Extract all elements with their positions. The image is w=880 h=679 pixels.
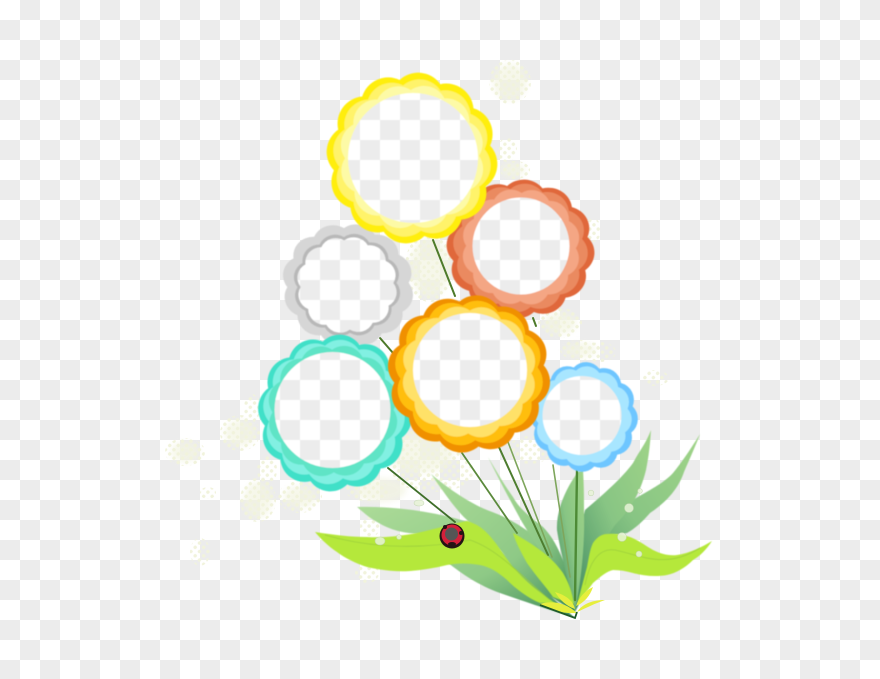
leaf: far right pointed leaf	[575, 434, 700, 612]
flower: orange	[442, 174, 599, 324]
halftone splashes behind bouquet	[165, 60, 669, 583]
leaf: long left back leaf	[357, 507, 575, 618]
leaf: narrow back leaf	[488, 457, 575, 605]
dark base stroke	[540, 605, 577, 618]
flower: teal	[251, 328, 419, 498]
back green leaves	[357, 430, 700, 618]
leaf: bright right leaf	[577, 534, 712, 604]
ladybird	[440, 524, 464, 548]
flower: yellow	[318, 64, 506, 252]
flower: blue	[527, 359, 641, 475]
water drops	[375, 489, 642, 557]
flower: amber	[377, 284, 561, 464]
leaf veins	[325, 535, 700, 600]
leaf: big middle back leaf	[431, 474, 575, 612]
leaf: bright middle leaf	[513, 533, 574, 604]
flower: grey	[283, 224, 414, 344]
bright green leaves	[315, 521, 712, 604]
flower stems	[380, 240, 577, 600]
leaf: bright left leaf	[315, 521, 555, 603]
leaf: centre upright leaf	[557, 470, 584, 612]
leaf: upper right pointed leaf	[575, 430, 651, 612]
yellow base sprouts	[540, 587, 605, 613]
